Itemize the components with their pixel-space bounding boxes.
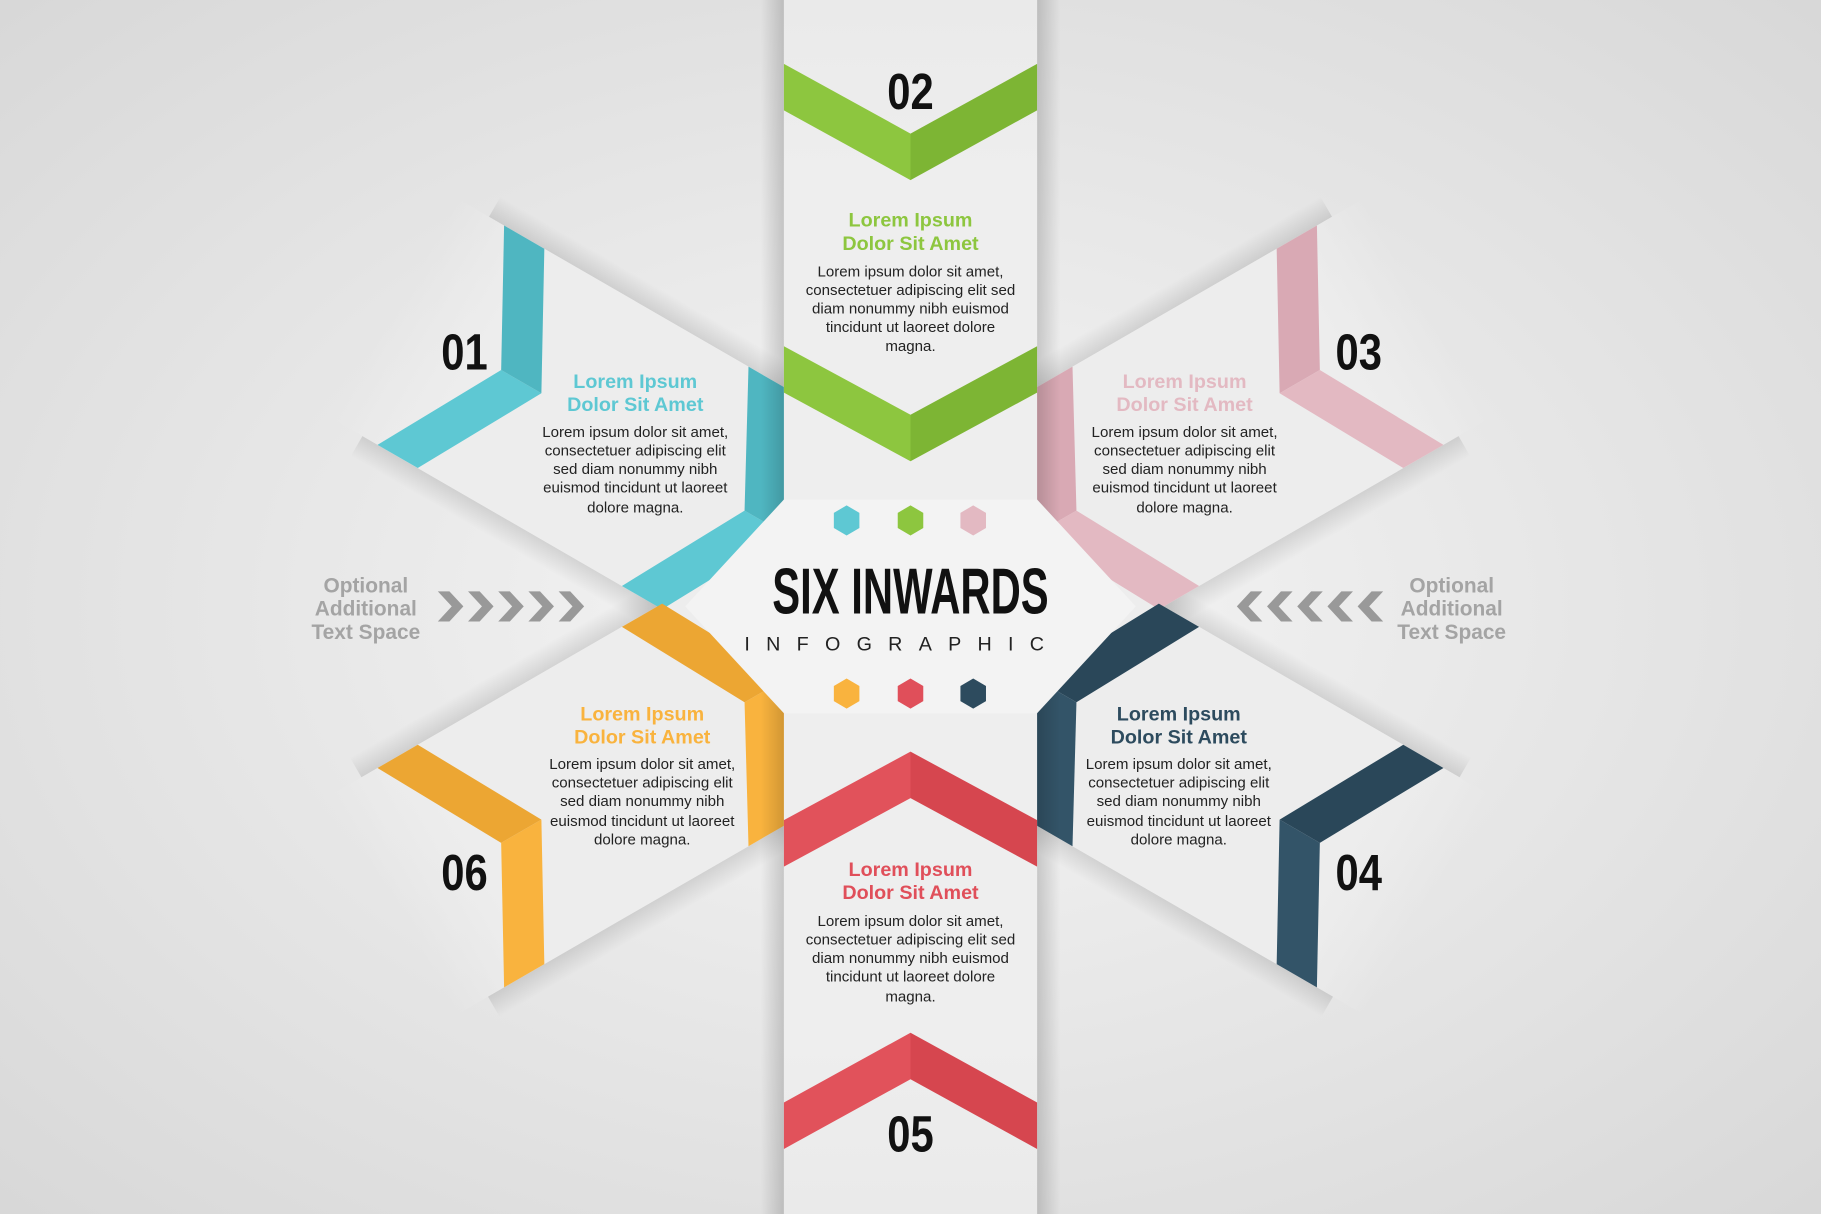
text 03: Lorem ipsum dolor sit amet, (1092, 424, 1278, 441)
numbers: 02 (887, 63, 934, 120)
text 03: euismod tincidunt ut laoreet (1092, 480, 1278, 497)
text 04: euismod tincidunt ut laoreet (1087, 813, 1272, 830)
chevrons: 04 dark blue (973, 569, 1443, 987)
text 05: Dolor Sit Amet (842, 882, 979, 904)
arrows right-pointing (438, 591, 584, 622)
text 02 (806, 210, 1015, 355)
optional text left (311, 574, 420, 644)
text 04: sed diam nonummy nibh (1097, 793, 1261, 810)
text 03: dolore magna. (1136, 499, 1233, 516)
text 01: Dolor Sit Amet (567, 394, 704, 416)
chevrons: 05 red (784, 752, 1037, 1149)
text 01: consectetuer adipiscing elit (545, 442, 727, 459)
vertical band 02-05 (761, 0, 1060, 1214)
text 06: Lorem Ipsum (580, 703, 704, 725)
numbers: 03 (1336, 323, 1382, 380)
text 04 (1086, 703, 1272, 849)
text 05: Lorem Ipsum (849, 859, 972, 881)
text 04: Lorem ipsum dolor sit amet, (1086, 756, 1272, 773)
chevrons: 03 pink (973, 225, 1443, 643)
chevrons: 06 orange (378, 569, 848, 987)
text 04: Dolor Sit Amet (1111, 726, 1247, 749)
numbers: 04 (1336, 844, 1382, 901)
chevrons: 02 green (784, 64, 1037, 461)
text 04: consectetuer adipiscing elit (1088, 775, 1270, 792)
numbers: 06 (441, 844, 488, 901)
optional text left: Optional (323, 574, 408, 597)
numbers: 05 (887, 1105, 934, 1162)
text 01: dolore magna. (587, 499, 683, 516)
text 04: dolore magna. (1131, 832, 1227, 849)
chevrons: 01 cyan (378, 225, 848, 643)
text 01: euismod tincidunt ut laoreet (543, 480, 728, 497)
text 02: tincidunt ut laoreet dolore (826, 319, 995, 336)
text 05 (806, 859, 1015, 1005)
text 06: consectetuer adipiscing elit (552, 775, 734, 792)
optional text right: Text Space (1397, 621, 1506, 644)
text 02: diam nonummy nibh euismod (812, 301, 1009, 318)
text 05: Lorem ipsum dolor sit amet, (817, 913, 1004, 930)
text 02: consectetuer adipiscing elit sed (806, 282, 1015, 299)
text 05: consectetuer adipiscing elit sed (806, 931, 1015, 948)
text 03: sed diam nonummy nibh (1102, 461, 1267, 478)
text 05: magna. (885, 988, 936, 1005)
text 01 (542, 371, 728, 516)
text 06: euismod tincidunt ut laoreet (550, 813, 735, 830)
optional text right (1397, 574, 1506, 644)
title: INFOGRAPHIC (744, 634, 1060, 656)
text 01: Lorem Ipsum (573, 371, 697, 393)
text 04: Lorem Ipsum (1117, 703, 1241, 725)
text 06 (549, 703, 735, 849)
text 03: consectetuer adipiscing elit (1094, 442, 1276, 459)
text 06: Dolor Sit Amet (574, 726, 711, 749)
diagonal band 03-06 (320, 179, 1500, 1034)
optional text left: Text Space (311, 621, 420, 644)
text 06: sed diam nonummy nibh (560, 793, 724, 810)
text 03 (1092, 371, 1278, 516)
center hexagon (685, 500, 1136, 713)
text 06: Lorem ipsum dolor sit amet, (549, 756, 735, 773)
numbers (441, 63, 1382, 1162)
text 02: Lorem Ipsum (849, 210, 972, 232)
optional text right: Optional (1409, 574, 1494, 597)
text 02: Dolor Sit Amet (842, 233, 979, 255)
text 05: tincidunt ut laoreet dolore (826, 969, 995, 986)
optional text left: Additional (315, 598, 417, 621)
optional text right: Additional (1401, 598, 1503, 621)
diagonal band 01-04 (321, 179, 1501, 1034)
text 01: sed diam nonummy nibh (553, 461, 717, 478)
text 02: Lorem ipsum dolor sit amet, (817, 263, 1004, 280)
arrows left-pointing (1237, 591, 1383, 622)
text 03: Lorem Ipsum (1123, 371, 1247, 393)
text 01: Lorem ipsum dolor sit amet, (542, 424, 728, 441)
text 06: dolore magna. (594, 832, 690, 849)
text 05: diam nonummy nibh euismod (812, 950, 1009, 967)
hexagon dots (834, 505, 986, 709)
text 02: magna. (885, 338, 936, 355)
title: SIX INWARDS (772, 554, 1049, 627)
text 03: Dolor Sit Amet (1116, 394, 1253, 416)
title (744, 554, 1060, 656)
numbers: 01 (441, 323, 488, 380)
